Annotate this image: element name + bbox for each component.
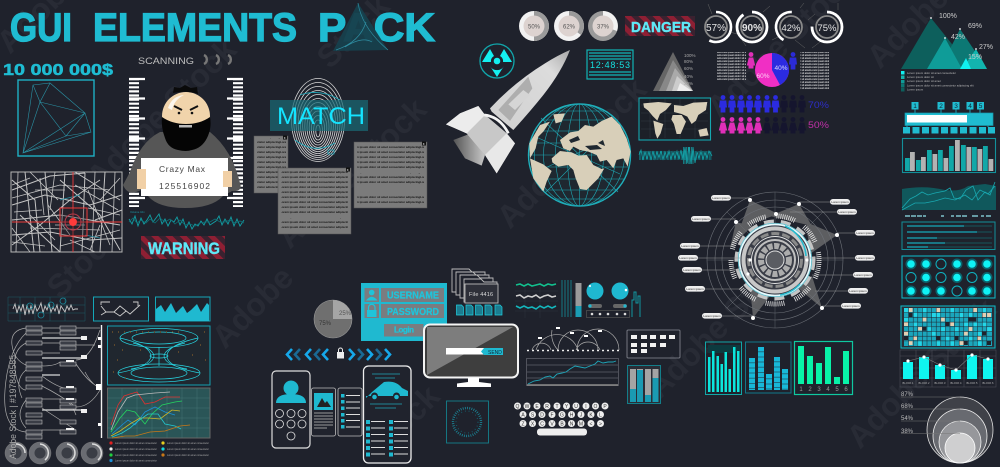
- chart: green bars: 5: [835, 387, 839, 393]
- hud nodes: [734, 198, 839, 320]
- panel: digital clock: 12:48:53: [590, 60, 630, 70]
- panel: indicator dots: [902, 256, 995, 298]
- small file icons: [456, 305, 502, 315]
- warning sign: WARNING: [148, 239, 220, 258]
- head highlight: [168, 95, 184, 110]
- hud rings: [707, 192, 843, 328]
- chart: pyramid: 60%: [684, 66, 693, 71]
- inner tube: [508, 90, 530, 110]
- illustration: man: [123, 85, 241, 208]
- placard: [141, 158, 228, 196]
- virtual keyboard: Z: [521, 422, 525, 428]
- virtual keyboard: U: [574, 404, 578, 410]
- head: [162, 92, 210, 140]
- chart: grey pie: 25%: [339, 311, 352, 317]
- hud labels: Lorem ipsum: [683, 268, 701, 272]
- chart: mountains: [901, 13, 993, 69]
- chart: volume wave: [129, 210, 244, 229]
- chart: nested circles: 54%: [901, 416, 914, 422]
- virtual keyboard: E: [535, 404, 539, 410]
- virtual keyboard: H: [570, 412, 574, 418]
- height ruler: [129, 78, 243, 207]
- gauge 57%: [701, 12, 731, 42]
- virtual keyboard: P: [603, 404, 607, 410]
- virtual keyboard: <: [590, 422, 593, 428]
- stock id watermark: Adobe Stock | #197848585: [8, 355, 19, 459]
- hud labels: Lorem ipsum: [679, 256, 697, 260]
- slider with numbered tabs: [903, 102, 995, 134]
- chart: cyan bars with dots: BLOCK 2: [919, 381, 930, 385]
- control knobs: [586, 282, 630, 318]
- monitor: [424, 324, 518, 387]
- panel: diamond: [18, 80, 94, 156]
- chart: area lines: [902, 182, 996, 210]
- window: [498, 77, 532, 121]
- watermarks: Adobe Stock: [639, 241, 803, 405]
- chart legend: Lorem ipsum dolor sit amet consectetur: [167, 454, 209, 457]
- chart: multi line: [107, 388, 210, 438]
- chart legend: Lorem ipsum dolor sit amet consectetur: [115, 454, 157, 457]
- slider with numbered tabs: 3: [954, 103, 958, 110]
- row: pink people 50%: [719, 117, 829, 134]
- panel: wormhole: [108, 326, 210, 385]
- virtual keyboard: K: [589, 412, 593, 418]
- hud labels: Lorem ipsum: [849, 289, 867, 293]
- chart: gender pie: 40%: [774, 65, 788, 72]
- chart: pyramid: 80%: [684, 59, 693, 64]
- monitor: SEND: [488, 350, 502, 356]
- virtual keyboard: >: [599, 422, 602, 428]
- chart: mountains: 27%: [979, 44, 993, 51]
- virtual keyboard: V: [550, 422, 554, 428]
- gauge 57%: 57%: [706, 23, 726, 34]
- virtual keyboard: O: [594, 404, 598, 410]
- gauge 75%: [812, 12, 842, 42]
- chart: cyan bars with dots: BLOCK 3: [935, 381, 946, 385]
- mountains legend: Lorem ipsum dolor sit: [907, 75, 934, 79]
- chart: gender pie: [755, 53, 789, 87]
- grey percent donuts: [519, 11, 618, 41]
- file stack: [452, 269, 498, 303]
- hud labels: Lorem ipsum: [712, 196, 730, 200]
- panel: city map: [11, 172, 122, 252]
- icon: scanning arrows: [204, 55, 231, 64]
- donut 62%: 62%: [563, 24, 576, 30]
- name: Crazy Max: [159, 164, 206, 174]
- icon: blue person: [789, 52, 797, 70]
- panel: particle circle: [446, 401, 488, 443]
- hud labels: Lorem ipsum: [681, 244, 699, 248]
- chart: green bars: [794, 342, 852, 394]
- virtual keyboard: T: [555, 404, 559, 410]
- chart legend: Lorem ipsum dolor sit amet consectetur: [115, 442, 157, 445]
- chart: pyramid: [653, 52, 696, 91]
- virtual keyboard: D: [540, 412, 544, 418]
- watermarks: Adobe Stock: [489, 71, 653, 235]
- chart: green bars: 1: [799, 387, 803, 393]
- chart: arcs: [527, 327, 620, 350]
- chart: mountains: 42%: [951, 34, 965, 41]
- hud labels: Lorem ipsum: [831, 200, 849, 204]
- slider with numbered tabs: 5: [979, 103, 983, 110]
- hud labels: Lorem ipsum: [854, 273, 872, 277]
- white percent gauges: [701, 3, 842, 48]
- chart: cyan bars with dots: BLOCK 5: [967, 381, 978, 385]
- icon: fingerprint: [292, 78, 344, 162]
- search bar: [446, 348, 484, 354]
- panel: digital clock: [587, 50, 633, 79]
- hud radial: [678, 192, 875, 328]
- hands: [137, 169, 232, 189]
- chart axis labels: [905, 215, 991, 217]
- arrows with lock: [287, 348, 390, 360]
- virtual keyboard: [514, 402, 608, 436]
- chart: mountains: 100%: [939, 13, 957, 20]
- greenland: [553, 113, 565, 123]
- chart: nested circles: 87%: [901, 392, 914, 398]
- document 1: [254, 136, 288, 193]
- text block left of pie: [717, 52, 746, 81]
- fins and collar: [446, 106, 515, 173]
- virtual keyboard: M: [579, 422, 583, 428]
- donut 37%: 37%: [597, 24, 610, 30]
- slider with numbered tabs: 4: [968, 103, 972, 110]
- hair: [173, 85, 198, 94]
- mountains legend: Lorem ipsum dolor sit amet consectetur adipiscing elit: [907, 84, 974, 88]
- chart: pyramid: 40%: [684, 74, 693, 79]
- chart: mountains: 15%: [968, 54, 982, 61]
- hud labels: Lorem ipsum: [842, 304, 860, 308]
- torso: [123, 132, 241, 208]
- chart: teal and grey bars: [902, 138, 996, 172]
- virtual keyboard: Q: [516, 404, 520, 410]
- virtual keyboard: W: [525, 404, 530, 410]
- donut gauges: [5, 442, 103, 464]
- chart: cyan bars with dots: BLOCK 6: [983, 381, 994, 385]
- africa: [552, 151, 604, 190]
- virtual keyboard: G: [560, 412, 564, 418]
- chart legend: Lorem ipsum dolor sit amet consectetur: [167, 442, 209, 445]
- illustration: globe: [528, 104, 631, 206]
- chart: cyan bars with dots: BLOCK 4: [951, 381, 962, 385]
- row: blue people 70%: 70%: [808, 100, 829, 110]
- gauge 42%: [771, 7, 811, 47]
- panel: zigzag circuit: [94, 297, 148, 321]
- chart: nested circles: 68%: [901, 404, 914, 410]
- file stack: File 4416: [469, 292, 493, 298]
- gauge 90%: 90%: [742, 23, 762, 34]
- chart: hex stack bars: [746, 342, 791, 393]
- chart: grey pie: [314, 300, 352, 338]
- chart: green bars: 6: [844, 387, 848, 393]
- rocket body: [490, 50, 570, 130]
- watermarks: Adobe Stock: [269, 91, 433, 255]
- chart legend: Lorem ipsum dolor sit amet consectetur: [115, 460, 157, 462]
- hud labels: Lorem ipsum: [856, 231, 874, 235]
- virtual keyboard: C: [540, 422, 544, 428]
- virtual keyboard: L: [599, 412, 602, 418]
- chart: mountains: 69%: [968, 23, 982, 30]
- chart: stock line: [526, 358, 618, 386]
- chart legend: Lorem ipsum dolor sit amet consectetur: [167, 448, 209, 451]
- send button: [481, 348, 503, 355]
- document 3: x: [423, 142, 425, 146]
- watermarks: Stock: [359, 378, 447, 465]
- watermarks: Adobe Stock: [839, 291, 1000, 455]
- virtual keyboard: I: [585, 404, 587, 410]
- panel: horizontal sliders: [902, 222, 995, 250]
- nozzle: [453, 134, 485, 166]
- mountains legend: [901, 71, 974, 92]
- chart: gender pie: 60%: [756, 73, 770, 80]
- chart: green bars: 4: [826, 387, 830, 393]
- hud labels: Lorem ipsum: [856, 256, 874, 260]
- label: scanning: SCANNING: [138, 56, 194, 67]
- username field: USERNAME: [387, 290, 439, 302]
- grey pointer triangles: [730, 200, 837, 318]
- chart: pyramid: 20%: [684, 81, 693, 86]
- eurasia: [560, 117, 631, 168]
- password field: PASSWORD: [387, 307, 439, 318]
- gauge 75%: 75%: [817, 23, 837, 34]
- chart: green bars: 2: [808, 387, 812, 393]
- gauge 90%: [737, 12, 767, 42]
- panel: buttons: [627, 330, 680, 358]
- phone: car: [364, 366, 411, 463]
- chart: pyramid: 100%: [684, 53, 696, 58]
- americas: [529, 122, 550, 158]
- mouth: [179, 125, 192, 128]
- virtual keyboard: B: [560, 422, 564, 428]
- document 2: [278, 168, 351, 234]
- title: PACK: [318, 6, 435, 50]
- watermarks: Stock: [39, 218, 127, 305]
- title: [10, 6, 435, 50]
- inland seas: [569, 136, 605, 150]
- panel: heat map grid: [901, 306, 995, 348]
- row: pink people 50%: 50%: [808, 120, 829, 130]
- user and lock icons: [366, 290, 378, 317]
- icon: pink person: [747, 52, 755, 68]
- phone: article: [312, 388, 336, 436]
- mountains legend: Lorem ipsum: [907, 88, 924, 92]
- hud labels: [678, 195, 875, 319]
- gauge spokes: [708, 3, 838, 48]
- diagram: node graph: [5, 325, 102, 439]
- virtual keyboard: S: [531, 412, 535, 418]
- phone: contact: [272, 371, 310, 448]
- brows and eyes: [174, 106, 198, 110]
- panel: match: MATCH: [277, 103, 365, 130]
- virtual keyboard: J: [580, 412, 583, 418]
- hud labels: Lorem ipsum: [686, 287, 704, 291]
- panel: teal area chart: [156, 297, 210, 321]
- virtual keyboard: Y: [565, 404, 569, 410]
- virtual keyboard: R: [545, 404, 549, 410]
- hud labels: Lorem ipsum: [838, 210, 856, 214]
- virtual keyboard: N: [570, 422, 574, 428]
- chart: volume wave: Volume 10x: [130, 210, 145, 214]
- virtual keyboard: F: [550, 412, 554, 418]
- chart: cyan bars with dots: BLOCK 1: [903, 381, 914, 385]
- chart: nested circles: [901, 392, 993, 463]
- login button: Login: [394, 326, 414, 334]
- document 2: x: [347, 168, 349, 172]
- virtual keyboard: A: [521, 412, 525, 418]
- mountains legend: Lorem ipsum dolor sit amet: [907, 79, 941, 83]
- slider with numbered tabs: 1: [913, 103, 917, 110]
- hud labels: Lorem ipsum: [692, 217, 710, 221]
- id number: 125516902: [159, 181, 210, 191]
- panel: three waveforms: [515, 280, 558, 318]
- icon: radiation: [480, 44, 514, 78]
- row: blue people 70%: [719, 95, 829, 112]
- virtual keyboard: X: [531, 422, 535, 428]
- chart: nested circles: 38%: [901, 429, 914, 435]
- chart: wave under map: [639, 147, 712, 164]
- chart: cyan thin bars: [706, 342, 742, 394]
- watermarks: Adobe Stock: [79, 31, 243, 195]
- danger sign: DANGER: [631, 19, 691, 36]
- hud connector lines: [698, 198, 855, 316]
- watermarks: Adobe: [204, 259, 300, 355]
- chart legend: [109, 441, 209, 462]
- panel: login: [361, 283, 447, 341]
- title: ELEMENTS: [93, 6, 297, 50]
- mountains legend: Lorem ipsum dolor sit amet consectetur: [907, 71, 956, 75]
- chart legend: Lorem ipsum dolor sit amet consectetur: [115, 448, 157, 451]
- slider with numbered tabs: 2: [939, 103, 943, 110]
- title: GUI: [10, 6, 72, 50]
- donut 50%: 50%: [528, 24, 541, 30]
- document 3: [354, 142, 427, 208]
- gauge 42%: 42%: [781, 23, 801, 34]
- phone: list: [338, 388, 362, 436]
- chart: cyan bars with dots: [900, 350, 996, 387]
- beard: [162, 117, 211, 151]
- panel: noisy waveform: [8, 297, 85, 321]
- illustration: rocket: [446, 50, 570, 173]
- heading: money: 10 000 000$: [3, 62, 113, 79]
- hud labels: Lorem ipsum: [703, 314, 721, 318]
- panel: world map: [639, 98, 710, 140]
- icon: title triangle: [333, 3, 388, 51]
- chart: green bars: 3: [817, 387, 821, 393]
- document 1: x: [284, 136, 286, 140]
- panel: vertical meters: [562, 280, 582, 317]
- chart: level bars: [628, 366, 660, 404]
- chart: grey pie: 75%: [319, 321, 332, 327]
- text block right of pie: [800, 52, 829, 89]
- small equalizer: [632, 292, 640, 317]
